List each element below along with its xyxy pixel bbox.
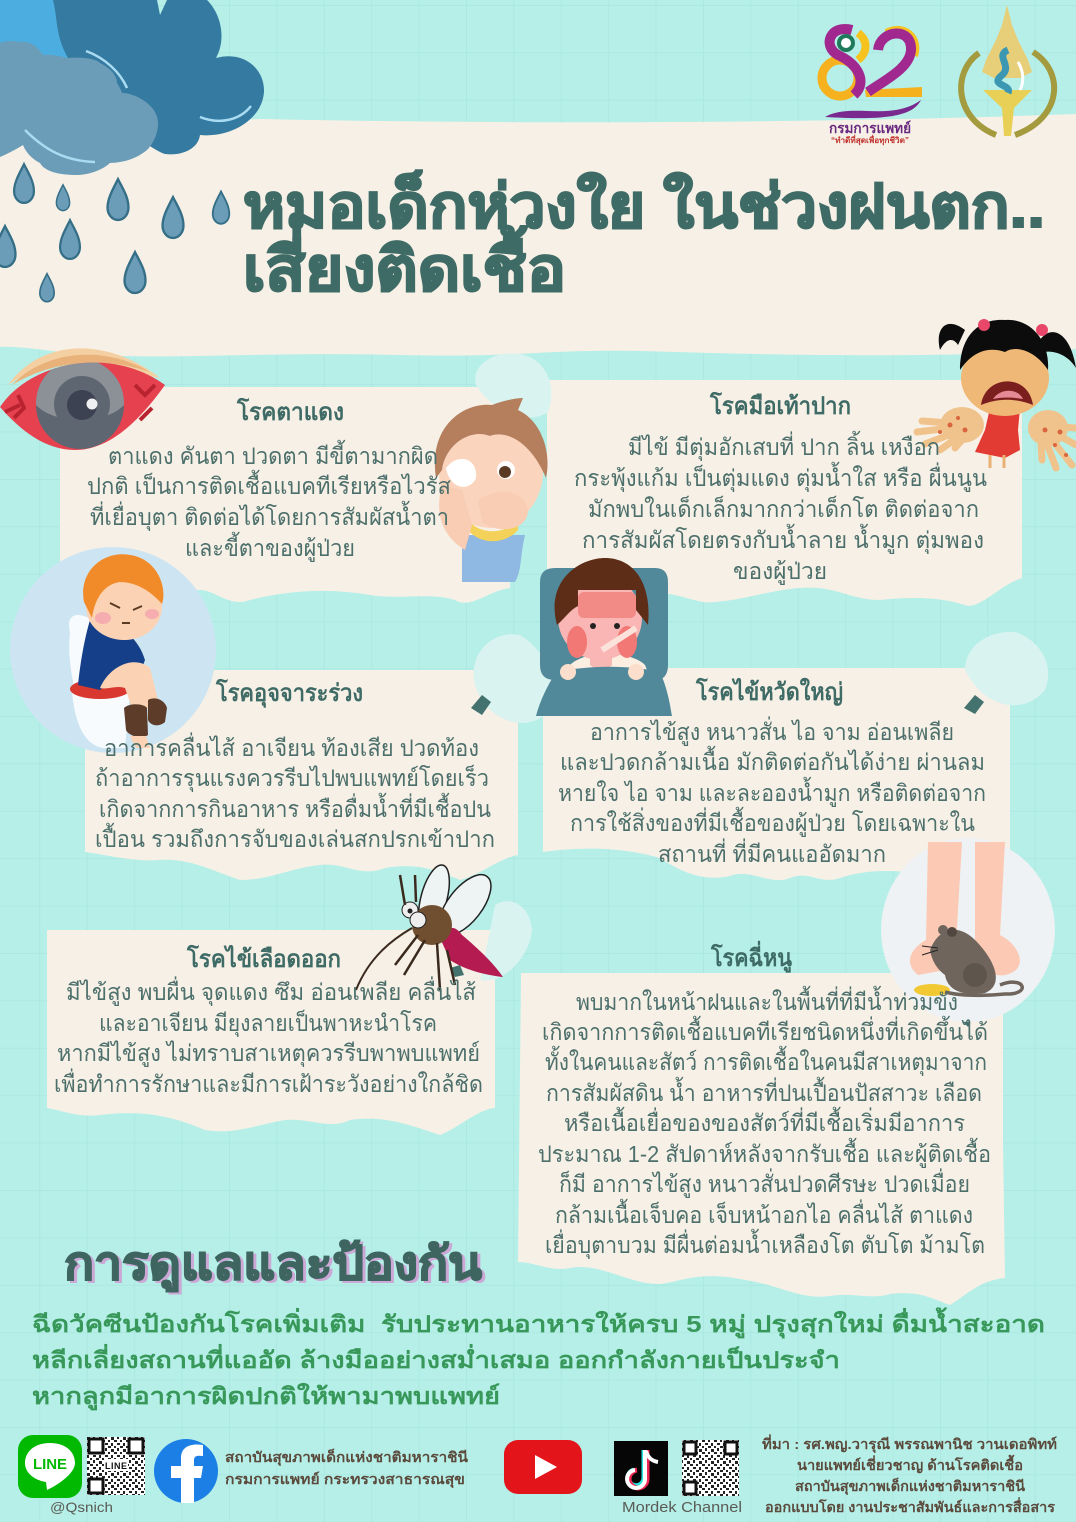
- text block: organization: [225, 1448, 468, 1488]
- text: diarrhea: อาการคลื่นไส้ อาเจียน ท้องเสีย ปวดท้อง: [104, 732, 479, 761]
- panel card: leptospirosis: [518, 973, 1005, 1305]
- icon: LINE: [18, 1435, 82, 1498]
- text block: prevention advice: [32, 1307, 1045, 1411]
- text: hand foot mouth: [574, 391, 987, 585]
- label: LINE handle: @Qsnich: [50, 1499, 113, 1515]
- text: diarrhea: ถ้าอาการรุนแรงควรรีบไปพบแพทย์โดยเร็ว: [95, 763, 489, 792]
- QR code: LINE: [87, 1437, 145, 1495]
- logo: department 82: กรมการแพทย์: [829, 120, 911, 136]
- text: conjunctivitis: ปกติ เป็นการติดเชื้อแบคทีเรียหรือไวรัส: [87, 470, 451, 499]
- text block: prevention advice: หลีกเลี่ยงสถานที่แออัด ล้างมืออย่างสม่ำเสมอ ออกกำลังกายเป็นประจำ: [32, 1343, 840, 1373]
- text: dengue: เพื่อทำการรักษาและมีการเฝ้าระวังอย่างใกล้ชิด: [54, 1068, 483, 1097]
- icon: raindrops: [0, 164, 229, 302]
- text: conjunctivitis: โรคตาแดง: [236, 397, 344, 426]
- text: influenza: โรคไข้หวัดใหญ่: [695, 677, 843, 706]
- icon: rain clouds: [0, 0, 264, 175]
- text: hand foot mouth: โรคมือเท้าปาก: [709, 391, 851, 420]
- panel card: diarrhea: [85, 670, 518, 880]
- logo: department 82: “ทำดีที่สุดเพื่อทุกชีวิต”: [831, 134, 909, 146]
- illustration: crying girl with rash: [917, 319, 1076, 468]
- text block: organization: กรมการแพทย์ กระทรวงสาธารณสุข: [225, 1471, 465, 1488]
- QR code: LINE: LINE: [105, 1461, 127, 1471]
- text: dengue: โรคไข้เลือดออก: [186, 944, 341, 973]
- panel card: dengue: [47, 930, 495, 1135]
- illustration: boy on toilet: [10, 547, 216, 753]
- text block: organization: สถาบันสุขภาพเด็กแห่งชาติมหาราชินี: [225, 1448, 468, 1466]
- text: hand foot mouth: ของผู้ป่วย: [733, 558, 827, 585]
- text: conjunctivitis: [87, 397, 451, 562]
- text block: credits: นายแพทย์เชี่ยวชาญ ด้านโรคติดเชื้อ: [797, 1454, 1023, 1474]
- logo: department 82: [822, 29, 922, 146]
- illustration: feet and rat: [881, 838, 1055, 1022]
- icon: Facebook: [154, 1439, 218, 1503]
- small teal marks: [450, 695, 984, 1027]
- title: หมอเด็กห่วงใย ในช่วงฝนตก..: [243, 170, 1045, 240]
- text block: prevention advice: ฉีดวัคซีนป้องกันโรคเพิ่มเติม รับประทานอาหารให้ครบ 5 หมู่ ปรุงสุกใหม่ ดื่มน้ำสะอาด: [32, 1307, 1045, 1339]
- logo: royal seal: [961, 5, 1054, 136]
- icon: LINE: LINE: [33, 1456, 67, 1473]
- illustration: boy wiping eye: [435, 398, 548, 582]
- panel card: conjunctivitis: [60, 387, 510, 603]
- text block: credits: [762, 1434, 1057, 1515]
- text: influenza: [558, 677, 986, 867]
- text: dengue: หากมีไข้สูง ไม่ทราบสาเหตุควรรีบพาพบแพทย์: [57, 1040, 480, 1067]
- QR code: TikTok: [682, 1440, 739, 1496]
- text: leptospirosis: เกิดจากการติดเชื้อแบคทีเรียชนิดหนึ่งที่เกิดขึ้นได้: [542, 1016, 988, 1045]
- text: influenza: และปวดกล้ามเนื้อ มักติดต่อกันได้ง่าย ผ่านลม: [560, 746, 985, 775]
- label: channel name: Mordek Channel: [622, 1499, 742, 1516]
- decorative blobs: [474, 353, 1048, 981]
- heading: care and prevention: การดูแลและป้องกัน: [64, 1237, 483, 1292]
- text: leptospirosis: เยื่อบุตาบวม มีผื่นต่อมน้ำเหลืองโต ตับโต ม้ามโต: [545, 1229, 985, 1259]
- text: conjunctivitis: ตาแดง คันตา ปวดตา มีขี้ตามากผิด: [108, 440, 438, 469]
- text: dengue: [54, 944, 483, 1097]
- text: hand foot mouth: มีไข้ มีตุ่มอักเสบที่ ปาก ลิ้น เหงือก: [628, 431, 940, 461]
- illustration: mosquito: [356, 862, 503, 990]
- text: conjunctivitis: ที่เยื่อบุตา ติดต่อได้โดยการสัมผัสน้ำตา: [90, 501, 449, 531]
- illustration: sick boy in bed: [536, 558, 672, 716]
- text block: credits: สถาบันสุขภาพเด็กแห่งชาติมหาราชินี: [795, 1477, 1025, 1495]
- text block: credits: ที่มา : รศ.พญ.วารุณี พรรณพานิช วานเดอพิทท์: [762, 1434, 1057, 1453]
- text: hand foot mouth: มักพบในเด็กเล็กมากกว่าเด็กโต ติดต่อจาก: [588, 494, 979, 522]
- text: leptospirosis: กล้ามเนื้อเจ็บคอ เจ็บหน้าอกไอ คลื่นไส้ ตาแดง: [555, 1199, 973, 1228]
- panel card: influenza: [543, 668, 1010, 880]
- text: leptospirosis: ทั้งในคนและสัตว์ การติดเชื้อในคนมีสาเหตุมาจาก: [545, 1046, 987, 1076]
- text: diarrhea: เปื้อน รวมถึงการจับของเล่นสกปรกเข้าปาก: [95, 823, 495, 852]
- text: leptospirosis: การสัมผัสดิน น้ำ อาหารที่ปนเปื้อนปัสสาวะ เลือด: [546, 1077, 982, 1106]
- icon: red eye: [0, 348, 165, 450]
- text: conjunctivitis: และขี้ตาของผู้ป่วย: [185, 532, 355, 562]
- text: influenza: สถานที่ ที่มีคนแออัดมาก: [658, 838, 886, 867]
- text: leptospirosis: [538, 940, 991, 1259]
- text: hand foot mouth: การสัมผัสโดยตรงกับน้ำลาย น้ำมูก ตุ่มพอง: [582, 524, 984, 554]
- text block: credits: ออกแบบโดย งานประชาสัมพันธ์และการสื่อสาร: [765, 1497, 1055, 1515]
- text block: prevention advice: หากลูกมีอาการผิดปกติให้พามาพบแพทย์: [32, 1382, 500, 1411]
- text: leptospirosis: หรือเนื้อเยื่อของของสัตว์ที่มีเชื้อเริ่มมีอาการ: [564, 1107, 965, 1136]
- text: dengue: และอาเจียน มียุงลายเป็นพาหะนำโรค: [99, 1008, 437, 1037]
- text: leptospirosis: พบมากในหน้าฝนและในพื้นที่ที่มีน้ำท่วมขัง: [576, 986, 958, 1015]
- text: influenza: การใช้สิ่งของที่มีเชื้อของผู้ป่วย โดยเฉพาะใน: [570, 807, 975, 837]
- icon: TikTok: [614, 1441, 668, 1496]
- text: leptospirosis: ก็มี อาการไข้สูง หนาวสั่นปวดศีรษะ ปวดเมื่อย: [559, 1168, 970, 1198]
- icon: YouTube: [504, 1440, 582, 1494]
- text: dengue: มีไข้สูง พบผื่น จุดแดง ซึม อ่อนเพลีย คลื่นไส้: [66, 976, 476, 1006]
- title: [243, 170, 1045, 303]
- text: diarrhea: เกิดจากการกินอาหาร หรือดื่มน้ำที่มีเชื้อปน: [99, 793, 491, 822]
- title: เสี่ยงติดเชื้อ: [243, 225, 566, 303]
- text: leptospirosis: โรคฉี่หนู: [710, 940, 793, 973]
- text: diarrhea: [95, 678, 495, 852]
- panel card: hand foot mouth: [547, 380, 1022, 606]
- text: leptospirosis: ประมาณ 1-2 สัปดาห์หลังจากรับเชื้อ และผู้ติดเชื้อ: [538, 1138, 991, 1168]
- text: diarrhea: โรคอุจจาระร่วง: [215, 678, 363, 709]
- text: influenza: หายใจ ไอ จาม และละอองน้ำมูก หรือติดต่อจาก: [558, 777, 986, 807]
- header band: [0, 114, 1076, 356]
- heading: care and prevention: การดูแลและป้องกัน: [67, 1239, 486, 1294]
- text: influenza: อาการไข้สูง หนาวสั่น ไอ จาม อ่อนเพลีย: [590, 716, 954, 746]
- text: hand foot mouth: กระพุ้งแก้ม เป็นตุ่มแดง ตุ่มน้ำใส หรือ ผื่นนูน: [574, 462, 987, 492]
